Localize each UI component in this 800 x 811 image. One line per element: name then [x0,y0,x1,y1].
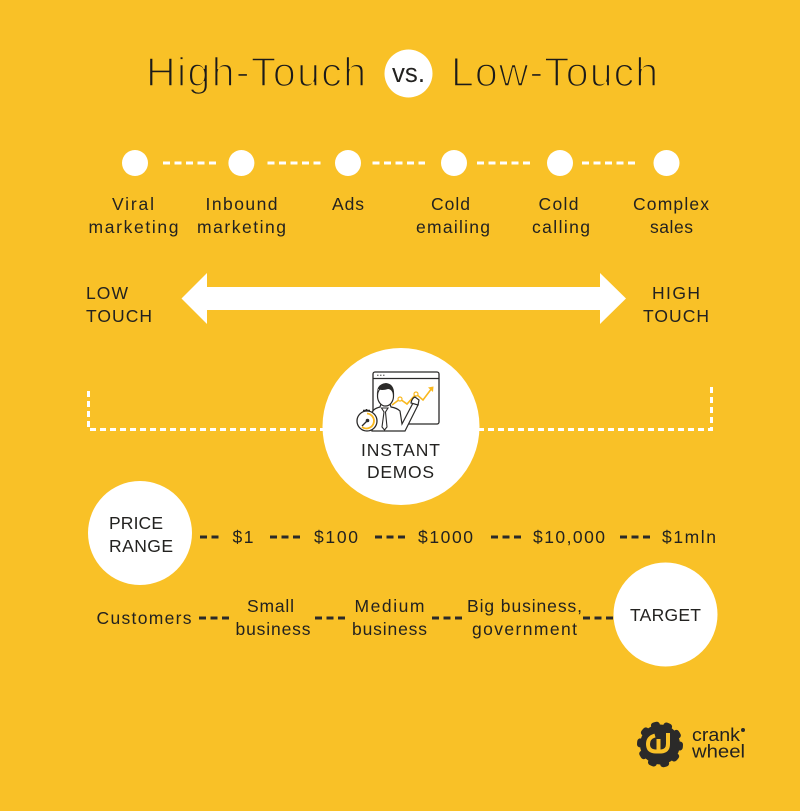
timeline of sales channels: emailing [416,217,490,237]
customer segments: Big business, [467,596,582,616]
price values: $1 [232,527,254,547]
timeline of sales channels: Cold [538,194,578,214]
timeline of sales channels [88,150,709,237]
wordmark: crank [692,725,741,745]
price values: $100 [314,527,358,547]
price range circle [88,481,192,585]
wordmark [691,725,745,762]
customer segments: government [472,619,577,639]
instant demos label: DEMOS [367,462,434,482]
title: Low-Touch [451,49,658,95]
price values: $10,000 [533,527,605,547]
instant demos label: INSTANT [361,440,440,460]
price values: $1000 [418,527,473,547]
double-headed arrow [182,273,626,324]
wordmark: wheel [691,742,745,762]
target circle: TARGET [630,605,701,625]
customer segments: Customers [96,608,192,628]
low touch label: LOW [86,283,128,303]
high touch label: TOUCH [643,306,709,326]
price range circle: PRICE [109,513,163,533]
price range circle: RANGE [109,536,173,556]
timeline of sales channels: calling [532,217,590,237]
low touch label: TOUCH [86,306,152,326]
title [146,49,658,98]
target customers row [96,562,718,666]
logo: crank wheel [640,724,745,764]
instant demos circle [322,348,480,505]
customer segments: business [236,619,311,639]
price dashes [200,536,650,538]
target circle [614,562,718,666]
timeline of sales channels: Complex [633,194,709,214]
customer segments: Medium [354,596,424,616]
customer segments: business [352,619,427,639]
title: High-Touch [146,49,366,95]
price range row [88,481,716,585]
instant demos label [361,440,440,482]
timeline of sales channels: marketing [197,217,286,237]
timeline of sales channels: Inbound [206,194,278,214]
price values: $1mln [662,527,716,547]
timeline of sales channels: Ads [332,194,364,214]
timeline of sales channels: Cold [431,194,470,214]
high touch label [643,283,709,326]
icon: presenter with chart and stopwatch [357,372,439,431]
customer segments [96,596,582,639]
customer segments: Small [247,596,294,616]
dashed bracket [88,387,712,430]
high touch label: HIGH [652,283,700,303]
low touch label [86,283,152,326]
title: vs. [392,58,425,88]
timeline of sales channels: sales [650,217,693,237]
icon: gear [640,724,680,764]
target dashes [199,616,613,620]
price values [232,527,716,547]
timeline of sales channels: Viral [112,194,154,214]
timeline of sales channels: marketing [88,217,178,237]
